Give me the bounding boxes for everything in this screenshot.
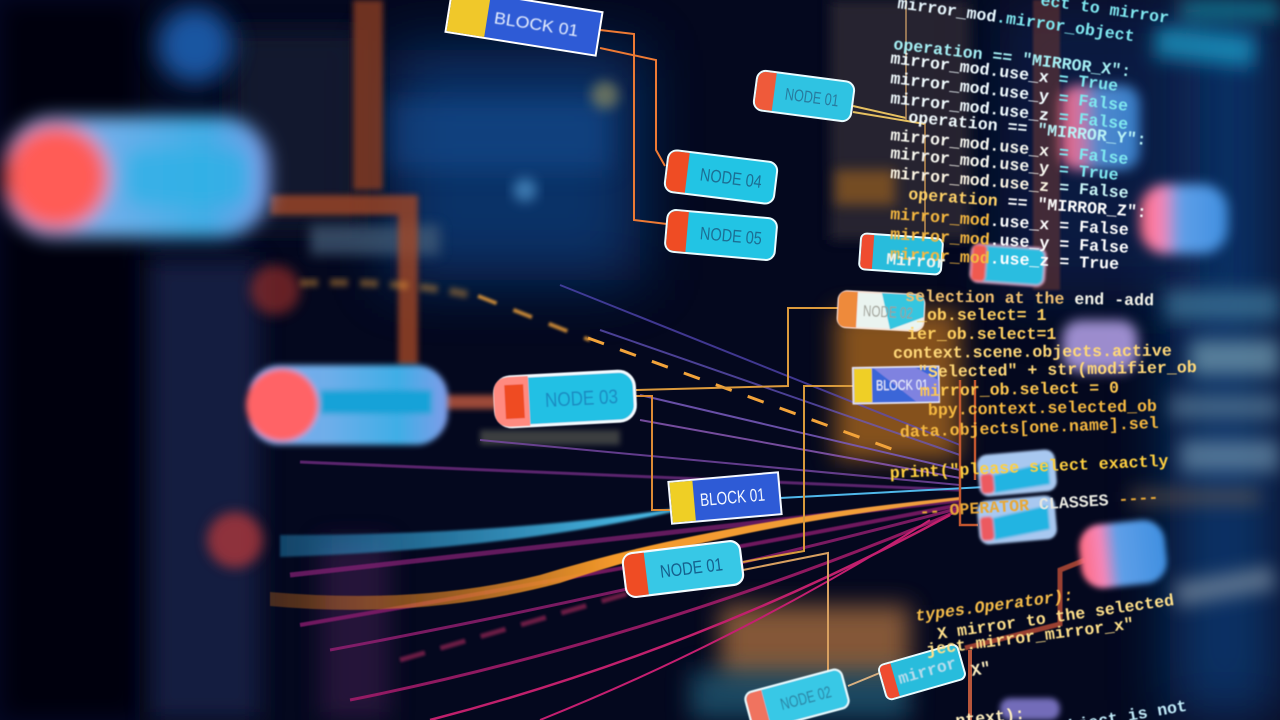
node: NODE 03: [493, 370, 636, 428]
node: mirror lower: [878, 643, 966, 701]
fan of magenta and purple lines: [280, 285, 960, 720]
node: NODE with washed label: [837, 291, 925, 331]
code panel: source code text: "Selected" + str(modifier_ob: [918, 358, 1197, 382]
code panel: source code text: ier_ob.select=1: [907, 325, 1056, 344]
blue signal line: [280, 509, 672, 557]
blurred pill: mid left: [246, 365, 448, 445]
node label overlays: mirror: [886, 250, 959, 689]
code panel: source code text: context.scene.objects.active: [893, 342, 1172, 363]
code panel: source code text: mirror_mod.use_z = True: [890, 245, 1119, 274]
node: BLOCK 01 top: BLOCK 01: [493, 8, 580, 40]
code panel: source code text: -- OPERATOR CLASSES ----: [919, 488, 1159, 522]
node: blurred pair lower: [976, 495, 1058, 545]
blurred connector lines: [270, 0, 500, 402]
node: NODE 01 lower: [622, 540, 744, 598]
code panel: source code text: _ob.select= 1: [916, 306, 1046, 325]
blurred pill: right upper: [1140, 184, 1228, 254]
code panel: source code text: selection at the end -add: [905, 287, 1154, 310]
code panel: source code text: mirror_mod.use_y = True: [890, 144, 1119, 185]
node label overlays: mirror: Mirror: [886, 250, 947, 273]
node: NODE 01 lower: NODE 01: [659, 554, 724, 582]
code panel: source code text: mirror_mod.use_x = False: [889, 126, 1129, 169]
code panel: source code text: data.objects[one.name].sel: [900, 414, 1159, 442]
code panel: source code text: types.Operator):: [914, 586, 1075, 626]
node: BLOCK 01 middle: BLOCK 01: [699, 485, 766, 510]
node: NODE 02 bottom: [744, 668, 850, 720]
orange signal curve: [270, 497, 960, 610]
blurred data streaks at the right edge: [1130, 0, 1280, 607]
node: blurred pair upper: [976, 449, 1058, 497]
blurred pill: bottom: [1000, 698, 1060, 720]
node: BLOCK 01 washed: [853, 366, 939, 404]
code panel: source code text: bpy.context.selected_ob: [928, 397, 1157, 420]
code panel: source code text: mirror_mod.use_z = False: [889, 89, 1129, 134]
code panel: source code text: operation == "MIRROR_Z":: [908, 185, 1147, 222]
code panel: source code text: mirror_mod.use_x = False: [890, 205, 1129, 240]
code panel: source code text: [889, 0, 1197, 720]
node: NODE 05: [664, 209, 778, 261]
node label overlays: mirror: mirror: [896, 654, 959, 689]
node: NODE 04: [664, 149, 778, 205]
node: NODE 01 top: [753, 70, 855, 122]
code panel: source code text: operation == "MIRROR_X":: [892, 35, 1132, 81]
node: BLOCK 01 washed: BLOCK 01: [876, 376, 928, 394]
node: BLOCK 01 top: [445, 0, 603, 56]
code panel: source code text: mirror_mod.use_x = True: [889, 49, 1119, 96]
code panel: source code text: X": [970, 659, 992, 681]
code panel: source code text: mirror_mod.use_y = False: [890, 225, 1129, 258]
node: BLOCK 01 middle: [668, 472, 782, 524]
code panel: source code text: mirror_mod.use_z = False: [890, 164, 1129, 203]
node: NODE 03: NODE 03: [545, 386, 619, 412]
node: NODE with washed label: NODE 02: [863, 303, 913, 323]
node: NODE 01 top: NODE 01: [784, 85, 840, 110]
node: NODE 04: NODE 04: [699, 165, 763, 192]
blue signal line right: [780, 487, 985, 498]
node: NODE 02 bottom: NODE 02: [778, 682, 833, 714]
code panel: source code text: mirror_ob.select = 0: [920, 379, 1119, 401]
blurred pill: right top: [1060, 85, 1140, 170]
node: NODE 05: NODE 05: [699, 223, 763, 249]
code panel: source code text: print("please select exactly: [889, 452, 1169, 483]
orange connector lines: [600, 0, 1085, 720]
code panel: source code text: ject.mirror_mirror_x": [925, 615, 1135, 660]
blurred pill: large left: [4, 116, 270, 238]
code panel: source code text: operation == "MIRROR_Y":: [908, 108, 1147, 150]
blurred pill: right lower: [1077, 518, 1169, 590]
code panel: source code text: mirror_mod.use_y = False: [889, 69, 1129, 116]
node: mirror upper: [859, 233, 943, 275]
dashed orange trace: [300, 282, 900, 452]
blurred pill: right middle: [1062, 320, 1138, 372]
node: blurred upper right: [970, 243, 1046, 287]
code panel: source code text: X mirror to the selected: [936, 591, 1175, 644]
